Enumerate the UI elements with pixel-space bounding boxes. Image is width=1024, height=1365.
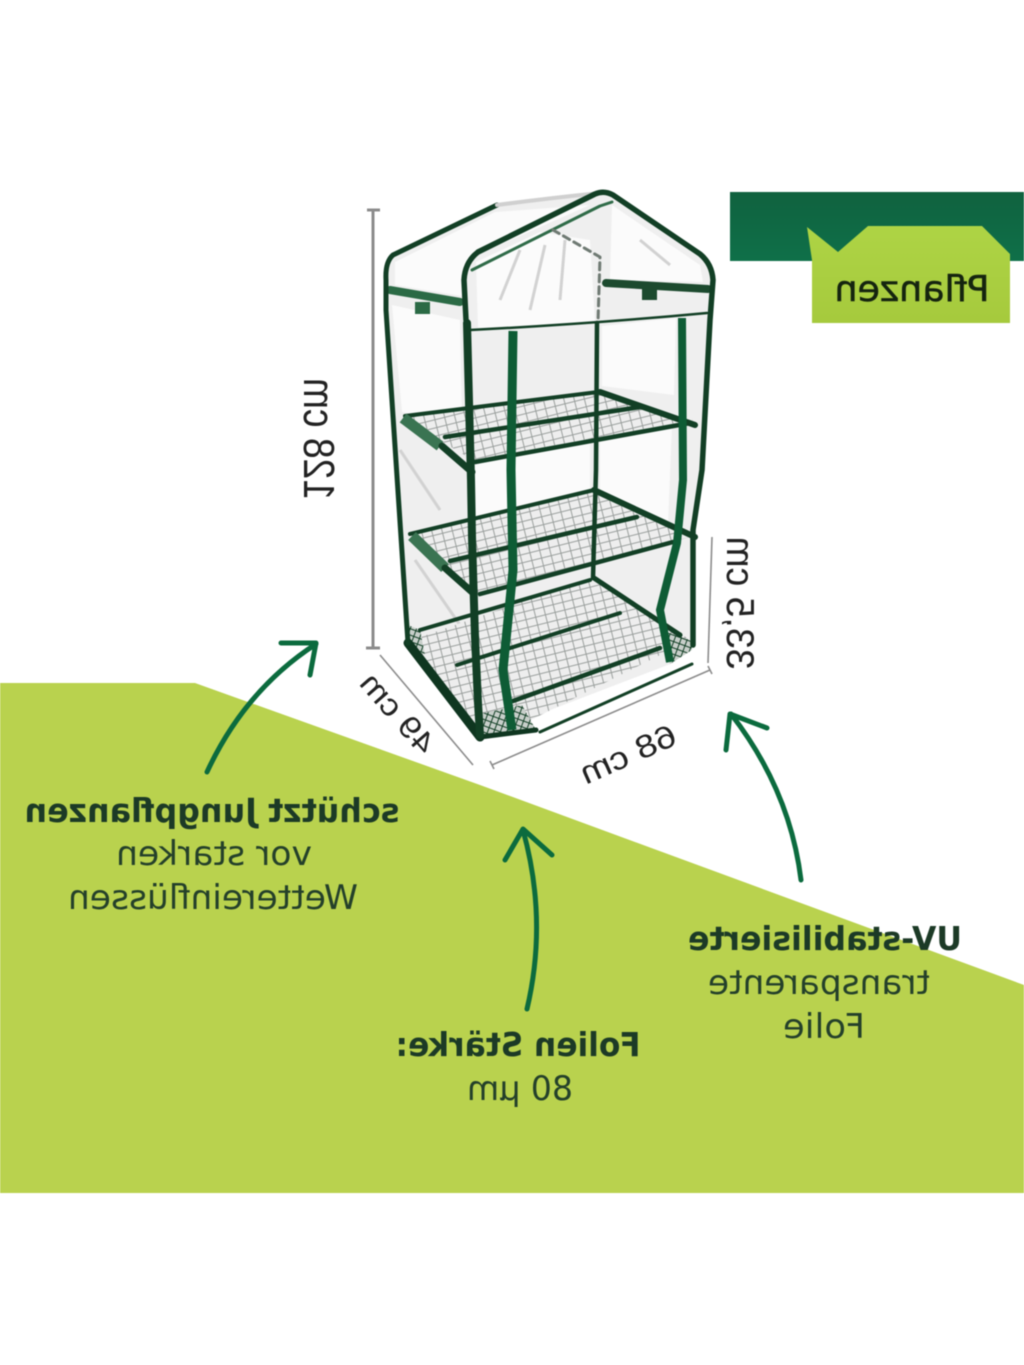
dimension: depth 49 cm: [353, 655, 473, 765]
light green tag: [807, 226, 1010, 323]
callout: Folien Stärke: Folien Stärke:: [396, 1025, 640, 1064]
brand tab: Pflanzen: [730, 192, 1024, 323]
dark green banner: [730, 192, 1024, 261]
dimension: height 128 cm: 128 cm: [294, 378, 343, 500]
greenhouse illustration: [385, 192, 713, 737]
callout: UV-stabilisierte: Folie: [783, 1007, 865, 1047]
dimension: depth 49 cm: 49 cm: [353, 666, 442, 761]
background green diagonal panel: [0, 683, 1024, 1193]
dimension: 33,5 cm: 33,5 cm: [718, 536, 761, 670]
greenhouse frame tubes: [386, 192, 713, 735]
arrow: UV film: [726, 714, 801, 880]
corner hatching: [408, 625, 692, 737]
callout: schützt Jungpflanzen: Wettereinflüssen: [68, 878, 358, 918]
roof eave bars with tabs: [390, 283, 708, 314]
transparent film cover: [385, 193, 713, 737]
arrow: young plants: [207, 643, 316, 772]
zip straps: [503, 318, 683, 730]
arrow: film thickness: [505, 829, 552, 1009]
callout: Folien Stärke: [396, 1025, 640, 1109]
callout: schützt Jungpflanzen: vor starken: [116, 834, 312, 874]
wire shelf meshes: [402, 393, 693, 735]
film fold shading: [400, 240, 670, 625]
dimension: height 128 cm: [294, 210, 380, 648]
callout: Folien Stärke: 80 µm: [467, 1069, 573, 1109]
tag label: Pflanzen: [834, 269, 990, 310]
film highlights: [392, 205, 703, 530]
dimension: width 68 cm: [490, 666, 712, 791]
callout: schützt Jungpflanzen: [24, 791, 400, 918]
shelf bars: [403, 392, 695, 737]
callout: UV-stabilisierte: UV-stabilisierte: [688, 919, 962, 958]
callout: UV-stabilisierte: [688, 919, 962, 1047]
dimension: width 68 cm: 68 cm: [574, 717, 682, 791]
callout: UV-stabilisierte: transparente: [708, 963, 930, 1003]
callout: schützt Jungpflanzen: schützt Jungpflanzen: [24, 791, 400, 830]
